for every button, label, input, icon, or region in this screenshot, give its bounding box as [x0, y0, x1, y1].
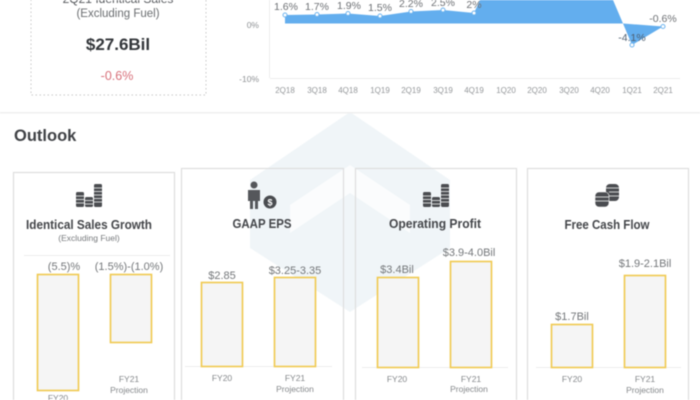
x axis labels: 4Q19 — [464, 86, 484, 95]
bar: FY20: FY20 — [562, 374, 582, 384]
data labels: 1.9% — [337, 0, 361, 12]
icon: person with dollar coin — [248, 182, 276, 209]
bar: FY21 projection: FY21 — [635, 374, 655, 384]
data labels: -4.1% — [618, 32, 646, 44]
bar: FY21 projection: Projection — [276, 384, 314, 394]
data labels: 1.7% — [305, 1, 329, 13]
icon: coin stacks — [76, 184, 102, 207]
panel: GAAP EPS — [182, 168, 344, 400]
title: Identical Sales Growth — [26, 218, 152, 232]
bar: FY21 projection — [443, 247, 495, 394]
bar: FY21 projection — [269, 265, 321, 394]
x axis labels: 1Q19 — [370, 86, 390, 95]
area series — [285, 0, 663, 45]
bar: FY21 projection: $3.9-4.0Bil — [443, 247, 495, 259]
card: identical sales summary — [31, 0, 206, 95]
panel: free cash flow — [528, 168, 688, 400]
x axis labels: 2Q18 — [275, 86, 295, 95]
y axis labels: 0% — [247, 20, 259, 30]
bar: FY20 — [378, 264, 418, 384]
x axis labels: 3Q18 — [307, 86, 327, 95]
bar: FY20 — [202, 270, 242, 383]
x axis labels: 3Q19 — [433, 86, 453, 95]
area chart: identical sales growth by quarter — [239, 0, 680, 95]
title: Free Cash Flow — [564, 218, 650, 232]
x axis labels: 2Q20 — [527, 86, 547, 95]
title: GAAP EPS — [232, 217, 292, 231]
icon: person with dollar coin: $ — [267, 198, 273, 208]
bar: FY21 projection: (1.5%)-(1.0%) — [95, 261, 163, 273]
y axis labels: -10% — [239, 74, 259, 84]
card subheading: (Excluding Fuel) — [76, 8, 160, 20]
bar: FY21 projection: $3.25-3.35 — [269, 265, 321, 277]
bar: FY21 projection: FY21 — [119, 374, 139, 384]
bar: FY20: $3.4Bil — [380, 264, 414, 276]
bar: FY20: $2.85 — [208, 270, 236, 282]
y axis labels — [239, 20, 259, 84]
x axis labels: 2Q19 — [401, 86, 421, 95]
bar: FY20 — [552, 311, 592, 384]
bar: FY21 projection: $1.9-2.1Bil — [619, 258, 671, 270]
x axis labels: 4Q20 — [590, 86, 610, 95]
data points — [283, 8, 665, 47]
bar: FY21 projection — [95, 261, 163, 395]
data labels — [274, 0, 677, 44]
x axis labels: 2Q21 — [653, 86, 673, 95]
panel: operating profit — [356, 168, 516, 400]
bar: FY20: FY20 — [212, 373, 232, 383]
x axis labels: 1Q21 — [622, 86, 642, 95]
bar: FY21 projection: FY21 — [461, 374, 481, 384]
panel: identical sales growth — [14, 172, 174, 400]
bar: FY21 projection: FY21 — [285, 373, 305, 383]
bar: FY21 projection: Projection — [110, 385, 148, 395]
card change: -0.6% — [101, 69, 133, 83]
bar: FY20 — [38, 261, 80, 400]
data labels: 1.6% — [274, 1, 298, 13]
card value: $27.6Bil — [86, 35, 150, 54]
x axis labels: 3Q20 — [559, 86, 579, 95]
x axis labels: 4Q18 — [338, 86, 358, 95]
bar: FY20: FY20 — [387, 374, 407, 384]
x axis labels: 1Q20 — [496, 86, 516, 95]
bar: FY20: (5.5)% — [48, 261, 80, 273]
bar: FY21 projection: Projection — [626, 385, 664, 395]
title: Operating Profit — [389, 217, 482, 231]
x axis labels — [275, 86, 673, 95]
data labels: -0.6% — [649, 13, 677, 25]
bar: FY20: $1.7Bil — [555, 311, 589, 323]
heading: outlook: Outlook — [14, 127, 77, 145]
bar: FY21 projection: Projection — [450, 384, 488, 394]
bar: FY21 projection — [619, 258, 671, 395]
subtitle: (Excluding Fuel) — [58, 233, 120, 243]
icon: coin stacks — [423, 184, 449, 207]
icon: two coin stacks — [595, 184, 619, 207]
data labels: 1.5% — [368, 2, 392, 14]
watermark: up chevrons — [250, 112, 450, 312]
